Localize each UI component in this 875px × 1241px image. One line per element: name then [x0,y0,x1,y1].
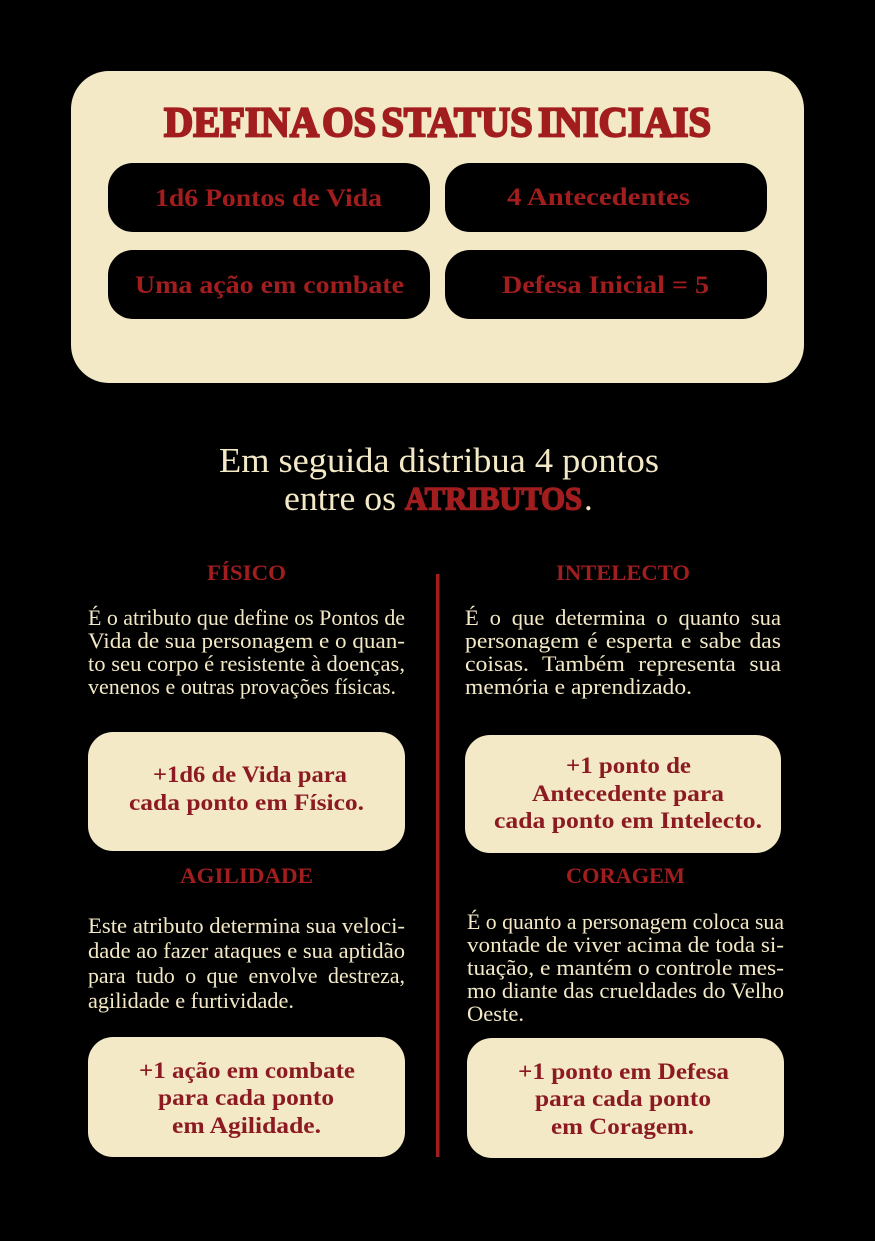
callout: coragem: em Coragem. [551,1114,694,1140]
text: físico: É o atributo que define os Pontos de [88,605,405,630]
heading: intelecto: INTELECTO [556,560,690,585]
callout: intelecto [465,735,781,853]
text: físico: Vida de sua personagem e o quan- [88,628,405,653]
heading: físico: FÍSICO [207,560,286,585]
callout: físico: cada ponto em Físico. [129,790,364,816]
intro heading: entre os [284,479,396,518]
text: coragem: vontade de viver acima de toda si- [467,932,784,957]
text: intelecto: coisas. Também representa sua [465,651,781,676]
callout: intelecto: +1 ponto de [566,753,691,779]
intro heading: . [584,479,593,518]
callout: agilidade [88,1037,405,1157]
callout: coragem: +1 ponto em Defesa [518,1059,729,1085]
attribute: coragem [467,863,784,1158]
text: coragem: tuação, e mantém o controle mes- [467,955,784,980]
intro heading: Em seguida distribua 4 pontos [219,441,659,480]
stat pill: pontos de vida [108,163,430,232]
text: coragem: Oeste. [467,1001,524,1026]
callout: agilidade: +1 ação em combate [139,1058,355,1084]
heading: agilidade: AGILIDADE [180,863,313,888]
callout: coragem: para cada ponto [535,1086,711,1112]
attribute: intelecto [465,560,781,853]
text: agilidade [88,913,405,1013]
center divider [436,574,440,1157]
text: agilidade: dade ao fazer ataques e sua aptidão [88,938,405,963]
text: intelecto: personagem é esperta e sabe das [465,628,781,653]
text: físico [88,605,405,699]
stat pill: defesa inicial [445,250,767,319]
callout: intelecto: cada ponto em Intelecto. [494,808,762,834]
callout: intelecto: Antecedente para [532,781,724,807]
text: agilidade: Este atributo determina sua veloci- [88,913,405,938]
callout: agilidade: em Agilidade. [172,1113,321,1139]
callout: coragem [467,1038,784,1158]
stat pill: defesa inicial: Defesa Inicial = 5 [502,272,709,299]
text: coragem: É o quanto a personagem coloca sua [467,909,784,934]
panel: status iniciais [71,71,804,383]
stat pill: antecedentes [445,163,767,232]
stat pill: ação em combate [108,250,430,319]
stat pill: antecedentes: 4 Antecedentes [507,184,690,211]
text: físico: to seu corpo é resistente à doenças, [88,651,405,676]
text: intelecto [465,605,781,699]
text: físico: venenos e outras provações físicas. [88,674,396,699]
intro heading [219,441,659,518]
callout: físico: +1d6 de Vida para [153,762,347,788]
text: agilidade: agilidade e furtividade. [88,988,294,1013]
stat pill: pontos de vida: 1d6 Pontos de Vida [155,185,383,212]
attribute: físico [88,560,405,851]
callout: físico [88,732,405,851]
callout: agilidade: para cada ponto [158,1085,334,1111]
text: intelecto: É o que determina o quanto sua [465,605,781,630]
attribute: agilidade [88,863,405,1157]
title: DEFINA OS STATUS INICIAIS [164,100,711,146]
text: agilidade: para tudo o que envolve destreza, [88,963,405,988]
heading: coragem: CORAGEM [566,863,685,888]
text: coragem: mo diante das crueldades do Velho [467,978,784,1003]
stat pill: ação em combate: Uma ação em combate [135,272,404,299]
text: intelecto: memória e aprendizado. [465,674,692,699]
text: coragem [467,909,784,1026]
intro heading: ATRIBUTOS [405,482,582,518]
